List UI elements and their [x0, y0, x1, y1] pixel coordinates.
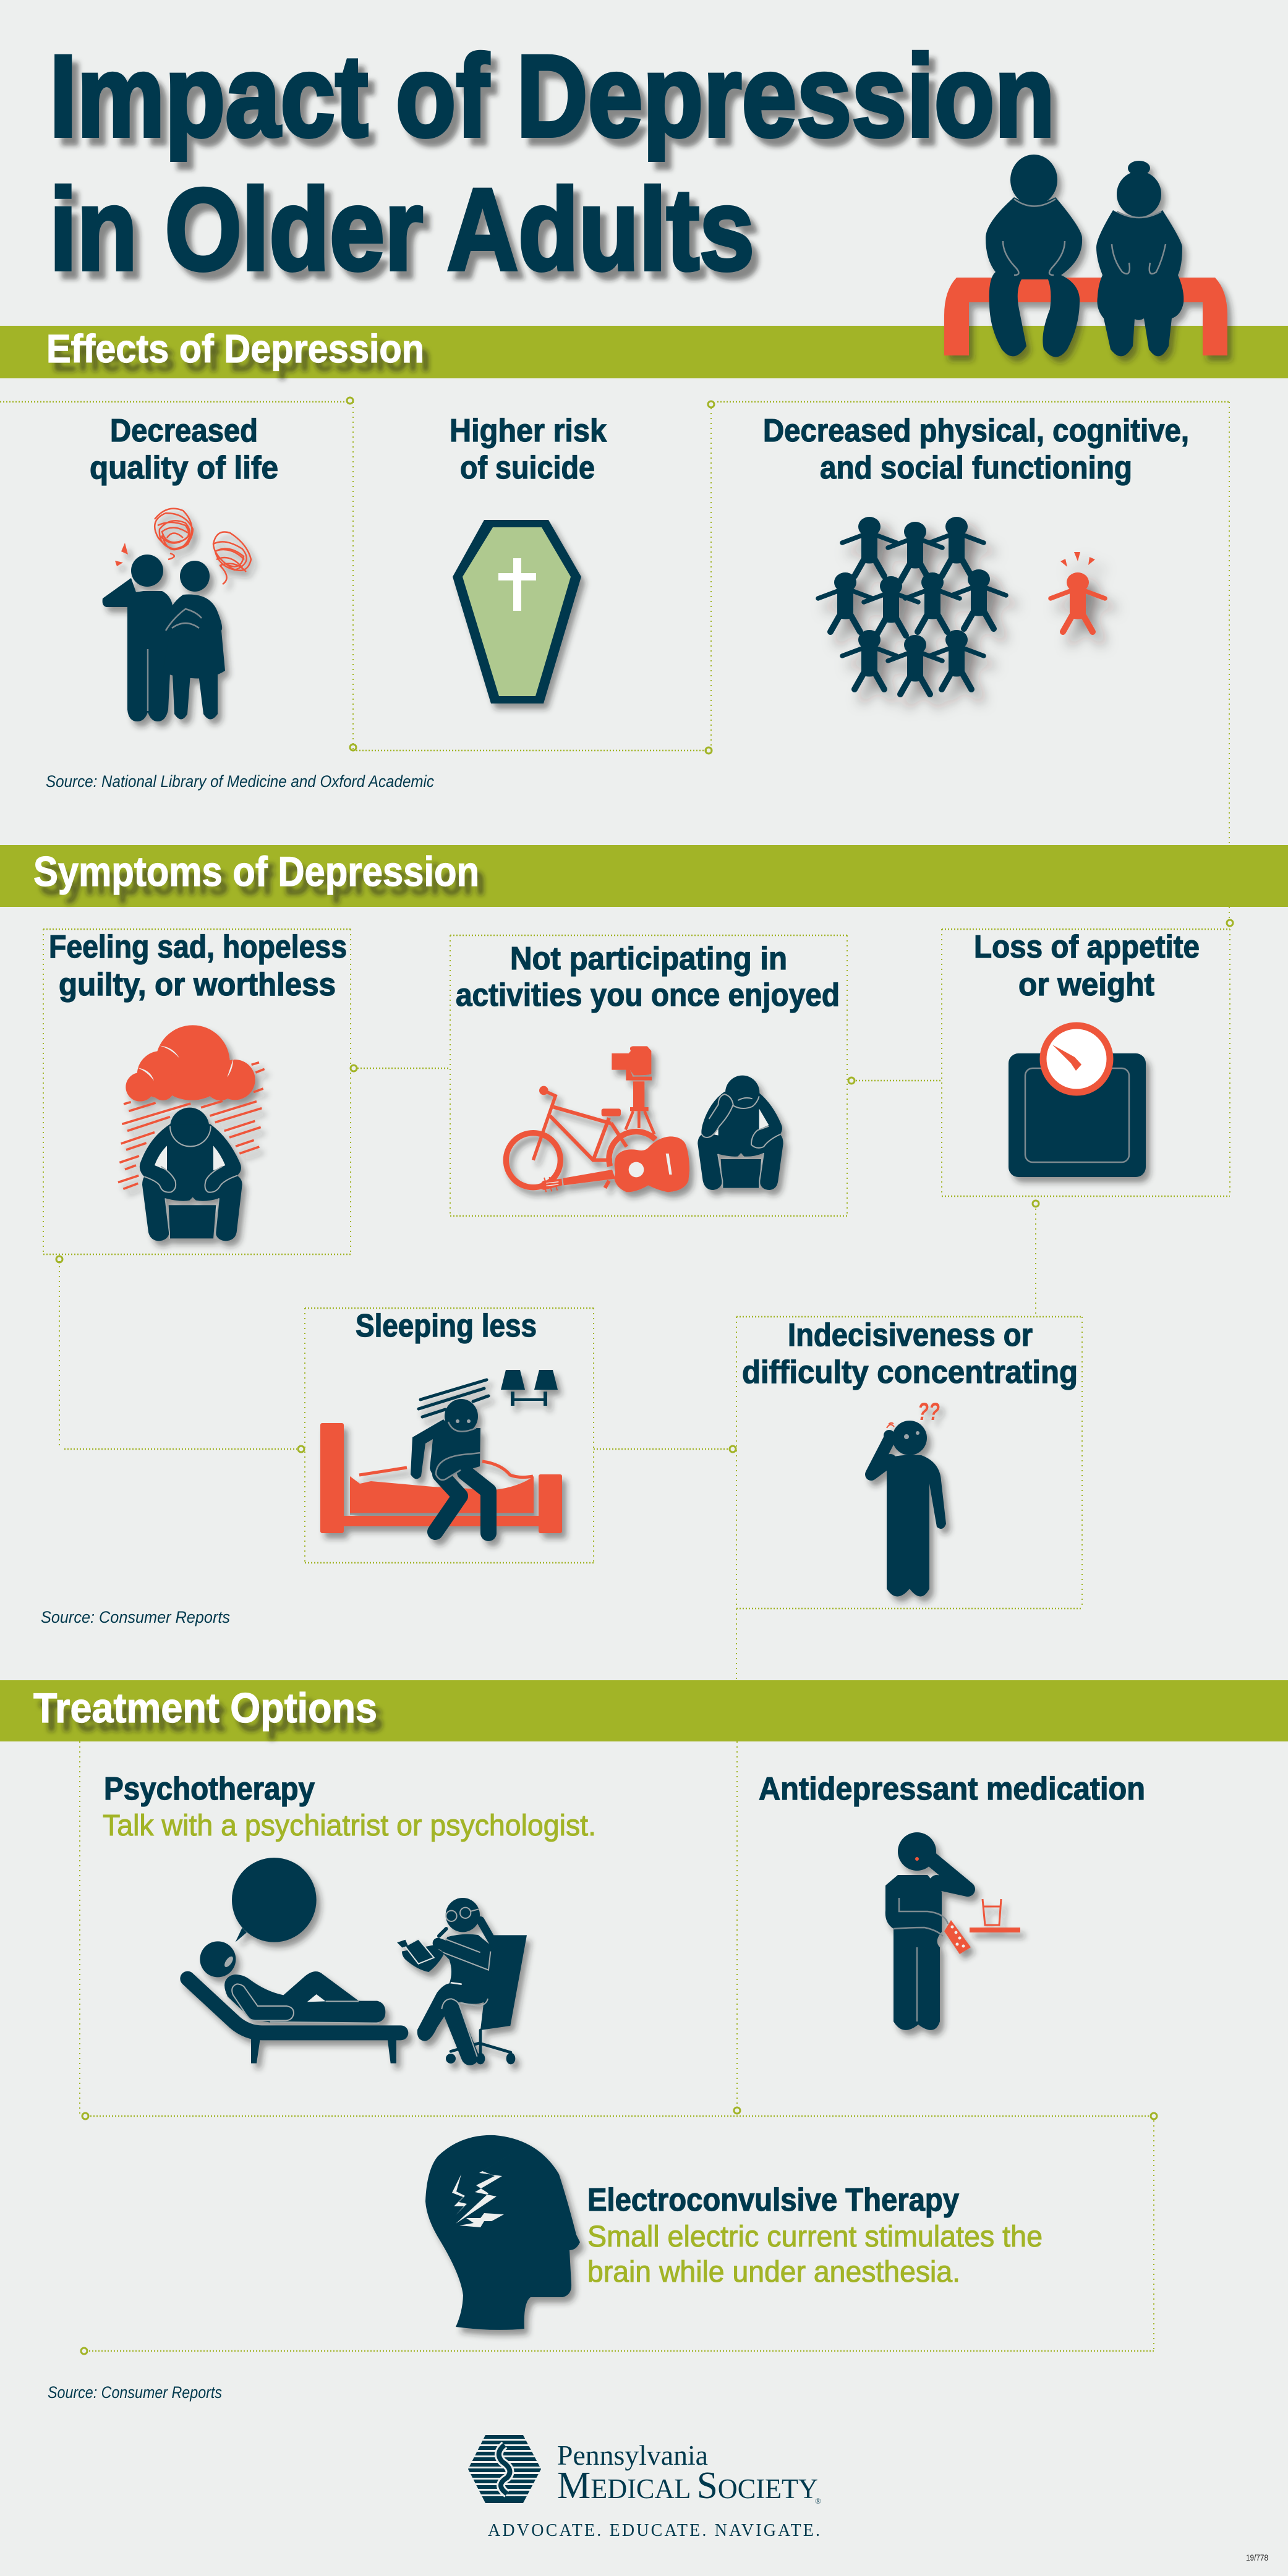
- panel: electroconvulsive therapy: [425, 2135, 1043, 2330]
- title: [49, 31, 1055, 294]
- heading: quality of life: [90, 450, 278, 486]
- heading: [456, 941, 840, 1013]
- heading: guilty, or worthless: [59, 967, 336, 1003]
- logo wordmark: MEDICAL SOCIETY: [557, 2465, 818, 2507]
- icon: crowd of figures: [818, 517, 1105, 694]
- section heading: treatment options: Treatment Options: [33, 1685, 377, 1732]
- question marks: ??: [918, 1398, 940, 1426]
- heading: [742, 1317, 1078, 1390]
- description: [587, 2221, 1043, 2289]
- title: in Older Adults: [49, 164, 754, 294]
- section heading: symptoms of depression: Symptoms of Depression: [33, 848, 479, 895]
- cloud: [126, 1025, 255, 1102]
- logo wordmark: ®: [815, 2496, 821, 2506]
- panel: decreased quality of life: [90, 413, 278, 721]
- person: [170, 1108, 209, 1147]
- panel: psychotherapy: [103, 1771, 596, 2064]
- source: treatment: Source: Consumer Reports: [48, 2383, 222, 2402]
- heading: of suicide: [460, 450, 595, 486]
- icon: person sitting on a bed: [320, 1370, 562, 1533]
- icon: confused person: [871, 1398, 946, 1596]
- heading: [49, 929, 347, 1003]
- panel: loss of appetite or weight: [974, 929, 1200, 1177]
- heading: difficulty concentrating: [742, 1354, 1078, 1390]
- panel: feeling sad, hopeless: [49, 929, 347, 1241]
- logo wordmark: Pennsylvania: [557, 2440, 708, 2471]
- panel: sleeping less: [320, 1308, 562, 1533]
- icon: person under rain cloud: [118, 1025, 265, 1241]
- man: [986, 155, 1082, 357]
- lamps: [501, 1370, 558, 1406]
- heading: [763, 413, 1189, 486]
- speech bubble: [232, 1858, 317, 1942]
- panel: decreased physical, cognitive and social functioning: [763, 413, 1189, 694]
- icon: head with lightning: [425, 2135, 580, 2330]
- icon: patient and therapist: [187, 1858, 527, 2064]
- logo: Pennsylvania Medical Society: [464, 2435, 821, 2540]
- heading: Electroconvulsive Therapy: [587, 2182, 959, 2218]
- camera on tripod: [612, 1046, 652, 1111]
- section heading: effects of depression: Effects of Depression: [46, 326, 424, 371]
- person: [725, 1076, 759, 1110]
- therapist: [446, 1898, 480, 1932]
- heading: Decreased: [110, 413, 258, 449]
- heading: Higher risk: [450, 413, 607, 449]
- title: Impact of Depression: [49, 31, 1055, 161]
- scribbles: [155, 509, 251, 584]
- orange isolated figure: [1051, 552, 1105, 632]
- bed: [320, 1423, 562, 1533]
- patient: [200, 1941, 236, 1977]
- couch: [187, 1979, 401, 2033]
- heading: or weight: [1018, 967, 1154, 1003]
- glass of water and table: [983, 1899, 1001, 1925]
- panel: indecisiveness or difficulty concentrating: [742, 1317, 1078, 1596]
- heading: and social functioning: [820, 450, 1132, 486]
- icon: bathroom scale: [1009, 1026, 1146, 1177]
- icon: person taking a pill: [885, 1832, 1020, 2030]
- heading: Decreased physical, cognitive,: [763, 413, 1189, 449]
- panel: higher risk of suicide: [450, 413, 607, 704]
- heading: Psychotherapy: [104, 1771, 315, 1807]
- description: Small electric current stimulates the: [587, 2221, 1043, 2253]
- source: effects: Source: National Library of Medicine and Oxford Academic: [46, 772, 434, 791]
- icon: upset couple: [103, 509, 251, 721]
- heading: Sleeping less: [356, 1308, 537, 1344]
- icon: coffin: [453, 520, 581, 704]
- heading: Antidepressant medication: [759, 1771, 1145, 1807]
- panel: antidepressant medication: [759, 1771, 1145, 2030]
- guitar: [614, 1136, 689, 1192]
- heading: Loss of appetite: [974, 929, 1200, 965]
- heading: Feeling sad, hopeless: [49, 929, 347, 965]
- panel: not participating in activities: [456, 941, 840, 1192]
- bench: [944, 278, 1227, 355]
- heading: activities you once enjoyed: [456, 977, 840, 1013]
- heading: [90, 413, 278, 486]
- description: Talk with a psychiatrist or psychologist.: [103, 1809, 596, 1842]
- heading: Not participating in: [510, 941, 787, 977]
- woman: [1096, 161, 1184, 356]
- logo wordmark: [557, 2440, 821, 2507]
- heading: [450, 413, 607, 486]
- therapist chair: [480, 1935, 527, 2030]
- notebook and pen: [439, 1929, 446, 1936]
- rain: [118, 1063, 265, 1189]
- source: symptoms: Source: Consumer Reports: [41, 1608, 230, 1626]
- description: brain while under anesthesia.: [587, 2256, 960, 2289]
- pill pack: [944, 1920, 971, 1954]
- heading: [974, 929, 1200, 1003]
- page number: 19/778: [1246, 2553, 1268, 2562]
- logo emblem: [464, 2435, 544, 2503]
- man: [411, 1399, 480, 1479]
- tagline: ADVOCATE. EDUCATE. NAVIGATE.: [488, 2521, 820, 2540]
- bicycle: [506, 1133, 560, 1188]
- motion lines: [419, 1380, 488, 1417]
- heading: Indecisiveness or: [788, 1317, 1033, 1353]
- icon: bicycle, camera, guitar and person: [506, 1046, 783, 1192]
- icon: older couple on a bench: [944, 155, 1227, 357]
